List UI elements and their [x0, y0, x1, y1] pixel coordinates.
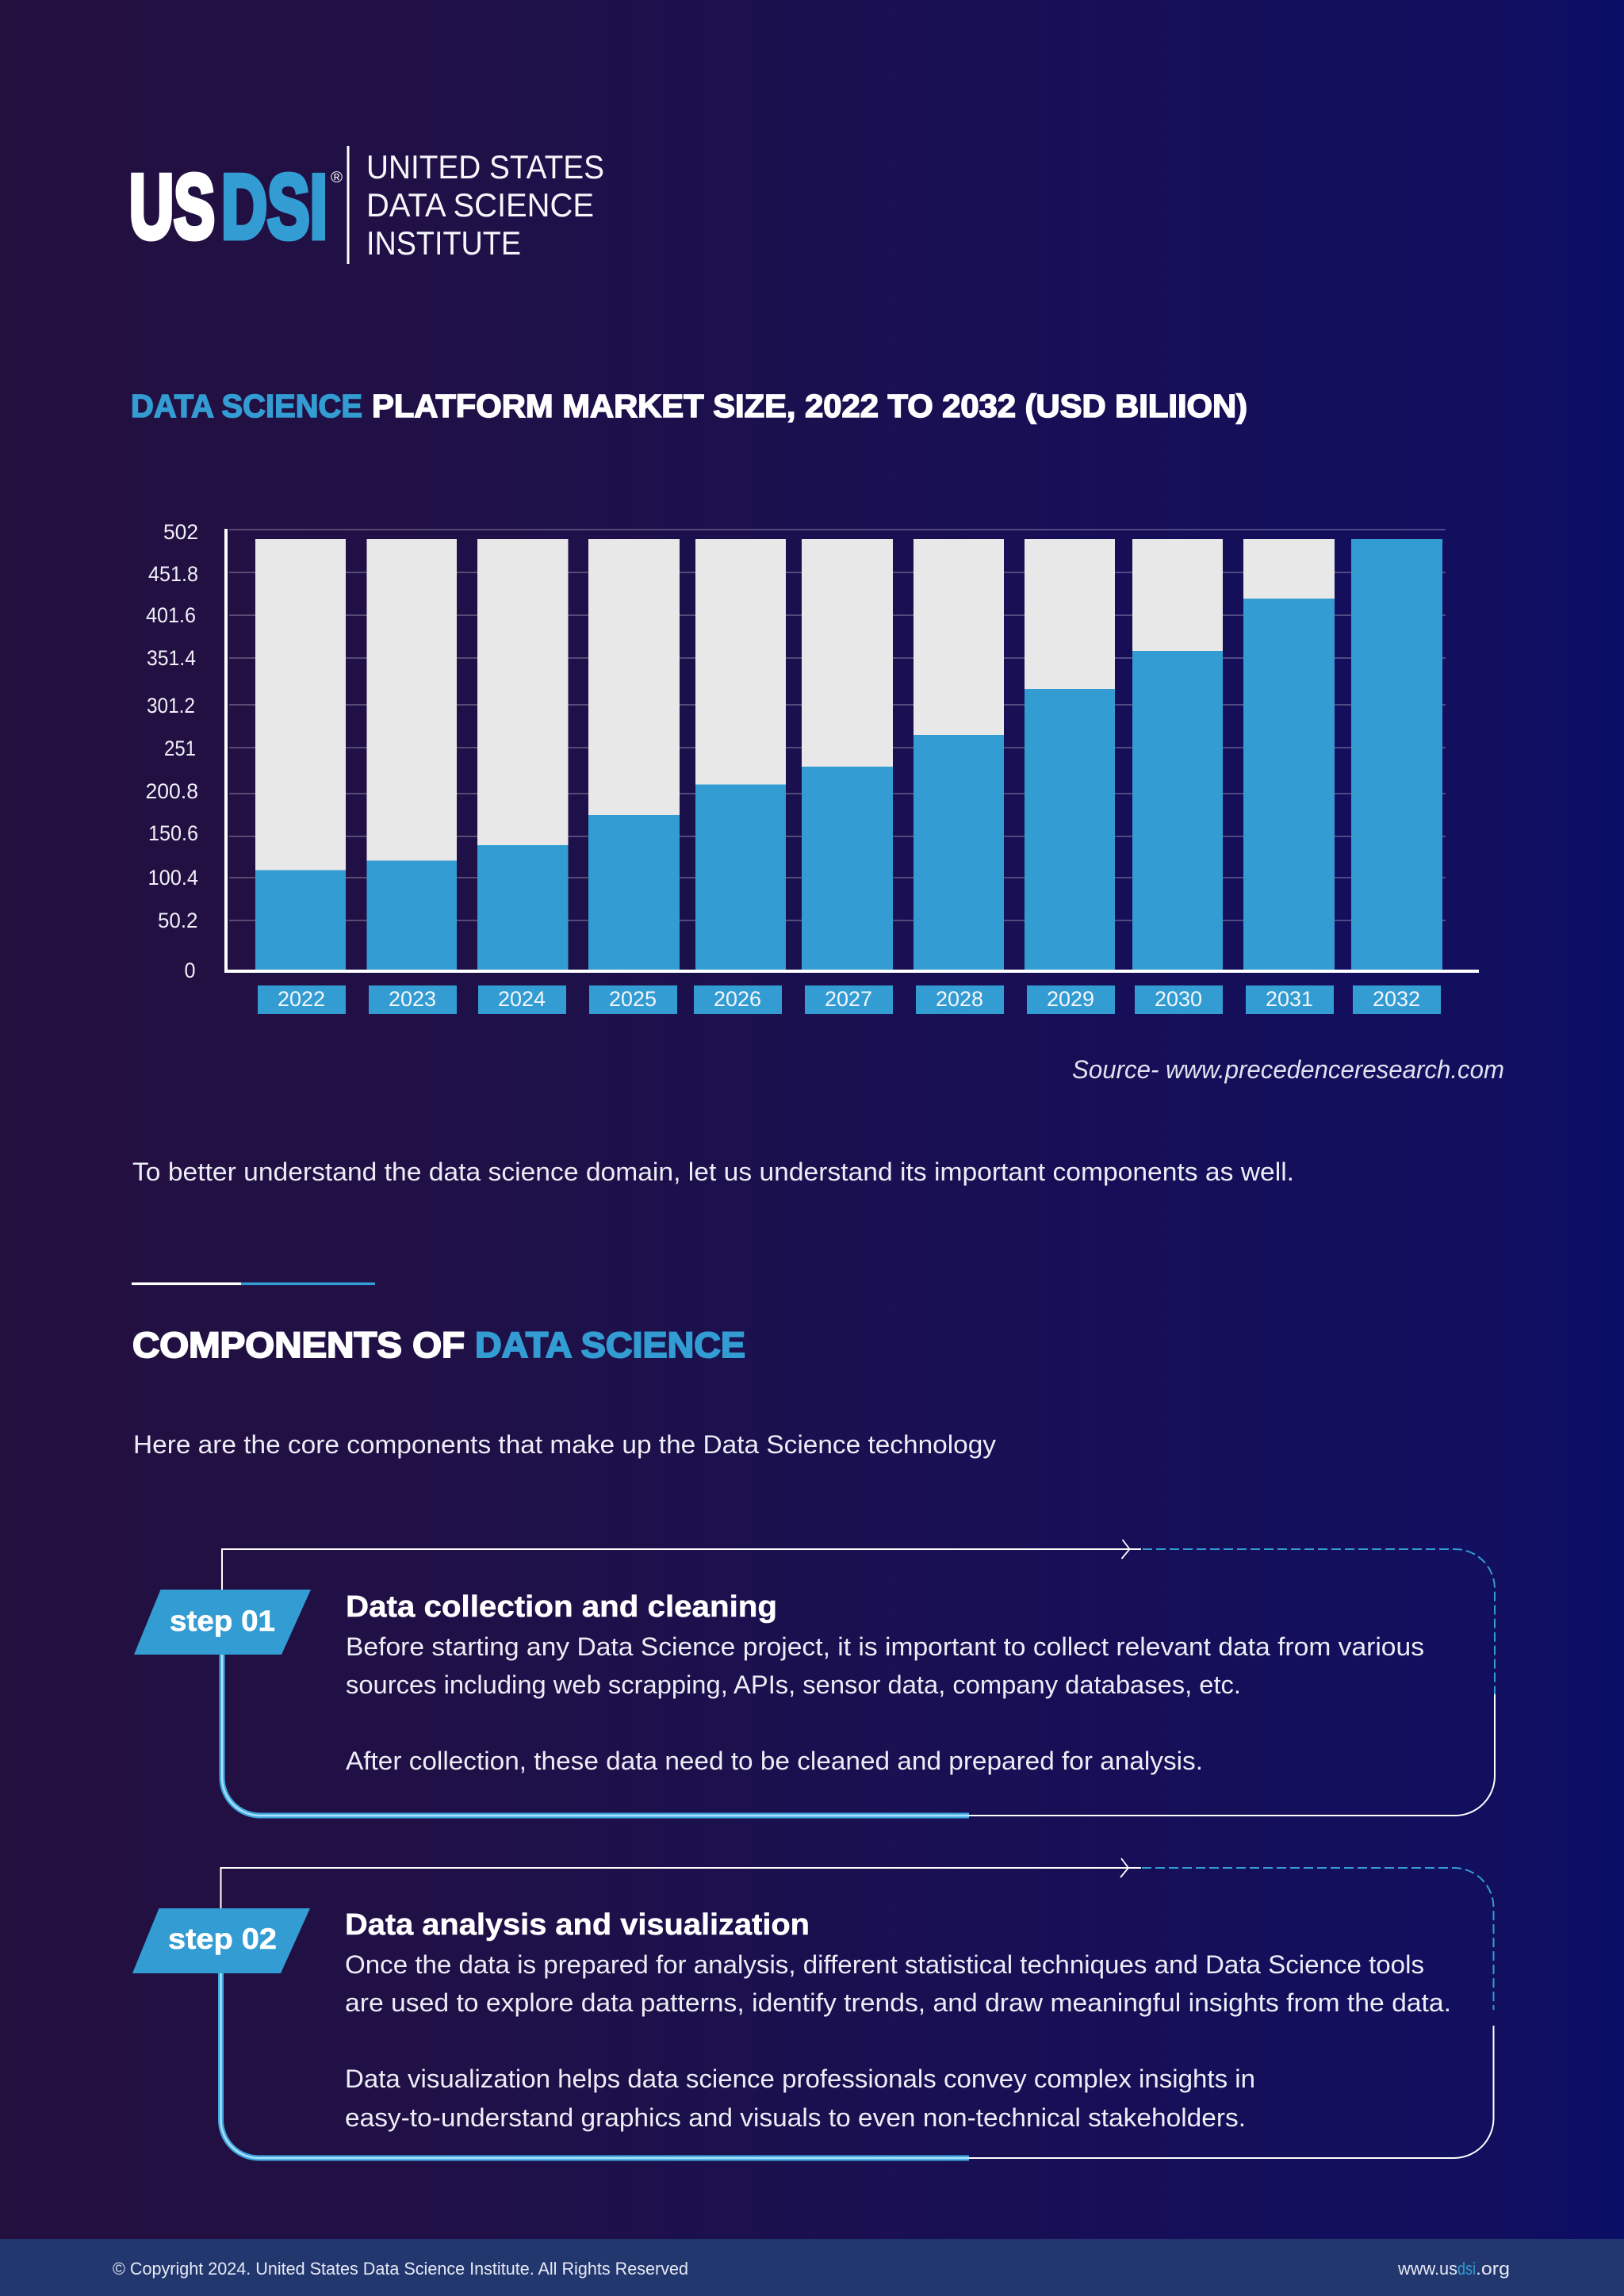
x axis year labels: 2028	[936, 987, 983, 1011]
y axis labels: 451.8	[148, 562, 198, 586]
y axis labels: 50.2	[158, 909, 198, 932]
step title: Data analysis and visualization	[345, 1908, 810, 1942]
logo text line 3: INSTITUTE	[366, 224, 521, 262]
x axis year labels: 2022	[278, 987, 325, 1011]
section intro text: Here are the core components that make up the Data Science technology	[133, 1430, 996, 1459]
thick blue frame	[220, 1973, 969, 2158]
thick blue frame	[222, 1655, 969, 1816]
step badge: step 01	[170, 1605, 275, 1637]
step description	[346, 1632, 1424, 1775]
x axis year labels: 2026	[714, 987, 761, 1011]
bar 2029	[1025, 539, 1115, 970]
bar 2027	[802, 539, 893, 970]
bar 2031	[1243, 539, 1335, 970]
bar 2030	[1132, 539, 1223, 970]
section divider	[132, 1283, 375, 1285]
step description: Once the data is prepared for analysis, different statistical techniques and Data Science tools	[345, 1950, 1424, 1979]
x axis year labels: 2027	[825, 987, 872, 1011]
frame dashed corner	[1143, 1549, 1495, 1694]
logo text line 1: UNITED STATES	[366, 148, 604, 186]
step description: After collection, these data need to be cleaned and prepared for analysis.	[346, 1747, 1203, 1775]
frame top line	[220, 1868, 1141, 1909]
step badge	[134, 1590, 311, 1655]
logo mark: US: US	[129, 157, 215, 258]
copyright: © Copyright 2024. United States Data Science Institute. All Rights Reserved	[113, 2259, 688, 2279]
frame dashed corner	[1142, 1868, 1494, 2010]
bar 2028	[914, 539, 1004, 970]
x axis year labels: 2029	[1047, 987, 1094, 1011]
y axis labels: 0	[184, 959, 195, 982]
website link: .org	[1476, 2259, 1510, 2279]
x axis year labels	[258, 985, 1441, 1014]
y axis labels: 351.4	[147, 646, 196, 670]
registered symbol: ®	[331, 170, 343, 186]
y axis labels: 200.8	[146, 779, 198, 803]
bar chart	[146, 520, 1479, 1014]
y axis labels: 502	[163, 520, 198, 544]
logo text line 2: DATA SCIENCE	[366, 186, 594, 224]
chart title: white part: PLATFORM MARKET SIZE, 2022 TO 2032 (USD BILIION)	[372, 388, 1247, 424]
step description: Before starting any Data Science project, it is important to collect relevant data from various	[346, 1632, 1424, 1661]
heading white part: COMPONENTS OF	[132, 1325, 465, 1365]
chart title	[131, 388, 1247, 424]
website link: www.us	[1397, 2259, 1457, 2279]
website link	[1397, 2259, 1510, 2279]
y axis labels: 100.4	[147, 866, 198, 890]
intro paragraph: To better understand the data science domain, let us understand its important components as well.	[132, 1158, 1294, 1186]
panel: step 01	[134, 1540, 1495, 1816]
frame right and bottom line	[969, 1694, 1495, 1816]
x axis year labels: 2023	[389, 987, 436, 1011]
website link: dsi	[1457, 2259, 1476, 2279]
bar 2026	[695, 539, 786, 970]
x axis year labels: 2030	[1155, 987, 1202, 1011]
step description: Data visualization helps data science professionals convey complex insights in	[345, 2064, 1255, 2093]
logo: USDSI United States Data Science Institute	[129, 146, 604, 264]
logo divider	[347, 146, 349, 264]
x axis year labels: 2032	[1373, 987, 1420, 1011]
bar 2023	[366, 539, 457, 970]
step description: sources including web scrapping, APIs, sensor data, company databases, etc.	[346, 1670, 1241, 1699]
x axis year labels: 2025	[609, 987, 657, 1011]
frame right and bottom line	[969, 2026, 1494, 2158]
y axis labels: 251	[164, 737, 196, 760]
step description: easy-to-understand graphics and visuals to even non-technical stakeholders.	[345, 2103, 1246, 2132]
chart title: blue part: DATA SCIENCE	[131, 388, 362, 424]
panel: step 02	[132, 1858, 1494, 2158]
y axis labels: 401.6	[146, 603, 196, 627]
arrow	[1121, 1540, 1129, 1559]
step badge: step 02	[168, 1923, 277, 1955]
y axis labels	[146, 520, 198, 982]
step description: are used to explore data patterns, identify trends, and draw meaningful insights from the data.	[345, 1988, 1451, 2017]
bars	[255, 539, 1442, 970]
bar 2024	[477, 539, 568, 970]
bar 2032	[1351, 539, 1442, 970]
arrow	[1120, 1858, 1128, 1877]
step badge	[132, 1908, 310, 1973]
frame top line	[222, 1549, 1141, 1590]
bar 2025	[588, 539, 680, 970]
x axis year labels: 2031	[1266, 987, 1313, 1011]
axes	[226, 529, 1479, 971]
heading blue part: DATA SCIENCE	[475, 1325, 745, 1365]
step title: Data collection and cleaning	[346, 1590, 777, 1624]
y axis labels: 301.2	[147, 694, 195, 718]
section heading	[132, 1325, 745, 1365]
y axis labels: 150.6	[148, 821, 198, 845]
logo mark: DSI: DSI	[221, 157, 327, 258]
chart source: Source- www.precedenceresearch.com	[1072, 1055, 1504, 1084]
x axis year labels: 2024	[498, 987, 546, 1011]
footer	[0, 2239, 1624, 2296]
bar 2022	[255, 539, 346, 970]
step description	[345, 1950, 1451, 2132]
